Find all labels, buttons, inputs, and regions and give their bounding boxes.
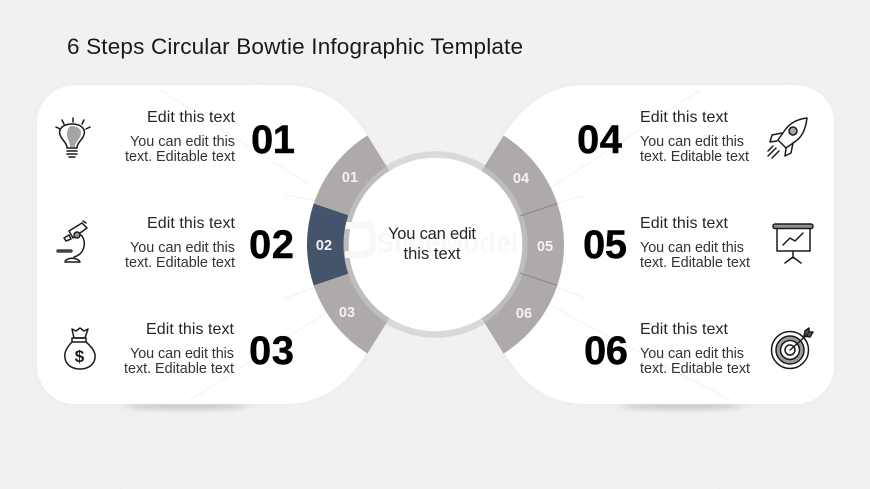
segment 02 bbox=[307, 204, 348, 286]
step 04 text: You can edit this bbox=[640, 134, 744, 150]
step 06 text: You can edit this bbox=[640, 346, 744, 362]
icon: microscope bbox=[58, 221, 87, 262]
step 05 number: 05 bbox=[583, 223, 627, 267]
watermark: SlideModel bbox=[376, 228, 519, 258]
center text bbox=[388, 225, 476, 263]
step 04 number: 04 bbox=[577, 118, 623, 162]
center text: this text bbox=[404, 245, 461, 263]
step 06 text: text. Editable text bbox=[640, 361, 750, 377]
step 01 text: Edit this text bbox=[147, 109, 236, 126]
step 04 text: text. Editable text bbox=[640, 149, 749, 165]
step 04 text bbox=[640, 109, 749, 165]
segment 04 bbox=[484, 136, 557, 215]
step 02 text: You can edit this bbox=[130, 240, 235, 256]
segment 01: 01 bbox=[342, 170, 358, 186]
title: 6 Steps Circular Bowtie Infographic Template bbox=[67, 34, 523, 59]
step 06 number: 06 bbox=[584, 329, 628, 373]
center ring bbox=[346, 154, 526, 334]
step 04 text: Edit this text bbox=[640, 109, 729, 126]
panel shadow: left bbox=[124, 401, 248, 409]
step 05 text: You can edit this bbox=[640, 240, 744, 256]
icon: target bbox=[772, 328, 813, 368]
segment 02: 02 bbox=[316, 238, 332, 254]
step 02 text: text. Editable text bbox=[125, 255, 235, 271]
step 01 number: 01 bbox=[251, 118, 295, 162]
panel: left steps bbox=[37, 85, 387, 404]
step 06 text: Edit this text bbox=[640, 321, 729, 338]
step 01 text: text. Editable text bbox=[125, 149, 235, 165]
step 03 number: 03 bbox=[249, 329, 294, 373]
icon: money bag bbox=[65, 328, 95, 369]
segment 04: 04 bbox=[513, 171, 529, 187]
segment 06: 06 bbox=[516, 306, 532, 322]
watermark bbox=[345, 222, 519, 258]
icon: money bag: $ bbox=[75, 347, 85, 366]
icon: rocket bbox=[768, 118, 807, 158]
center text: You can edit bbox=[388, 225, 476, 243]
step 03 text: text. Editable text bbox=[124, 361, 234, 377]
step 01 text bbox=[125, 109, 236, 165]
step 05 text bbox=[640, 215, 750, 271]
step 03 text bbox=[124, 321, 235, 377]
step 02 text bbox=[125, 215, 236, 271]
segmented ring bbox=[307, 136, 564, 354]
step 03 text: Edit this text bbox=[146, 321, 235, 338]
segment 01 bbox=[314, 136, 387, 215]
step 06 text bbox=[640, 321, 750, 377]
step 05 text: Edit this text bbox=[640, 215, 729, 232]
step 05 text: text. Editable text bbox=[640, 255, 750, 271]
segment 05: 05 bbox=[537, 239, 553, 255]
panel: right steps bbox=[484, 85, 834, 404]
step 03 text: You can edit this bbox=[130, 346, 234, 362]
panel shadow: right bbox=[620, 401, 744, 409]
segment 03: 03 bbox=[339, 305, 355, 321]
segment 03 bbox=[314, 274, 387, 354]
icon: light bulb bbox=[56, 118, 90, 157]
step 02 text: Edit this text bbox=[147, 215, 236, 232]
segment 05 bbox=[523, 204, 564, 286]
step 01 text: You can edit this bbox=[130, 134, 235, 150]
segment 06 bbox=[484, 274, 557, 354]
icon: presentation board bbox=[773, 224, 813, 263]
step 02 number: 02 bbox=[249, 223, 294, 267]
